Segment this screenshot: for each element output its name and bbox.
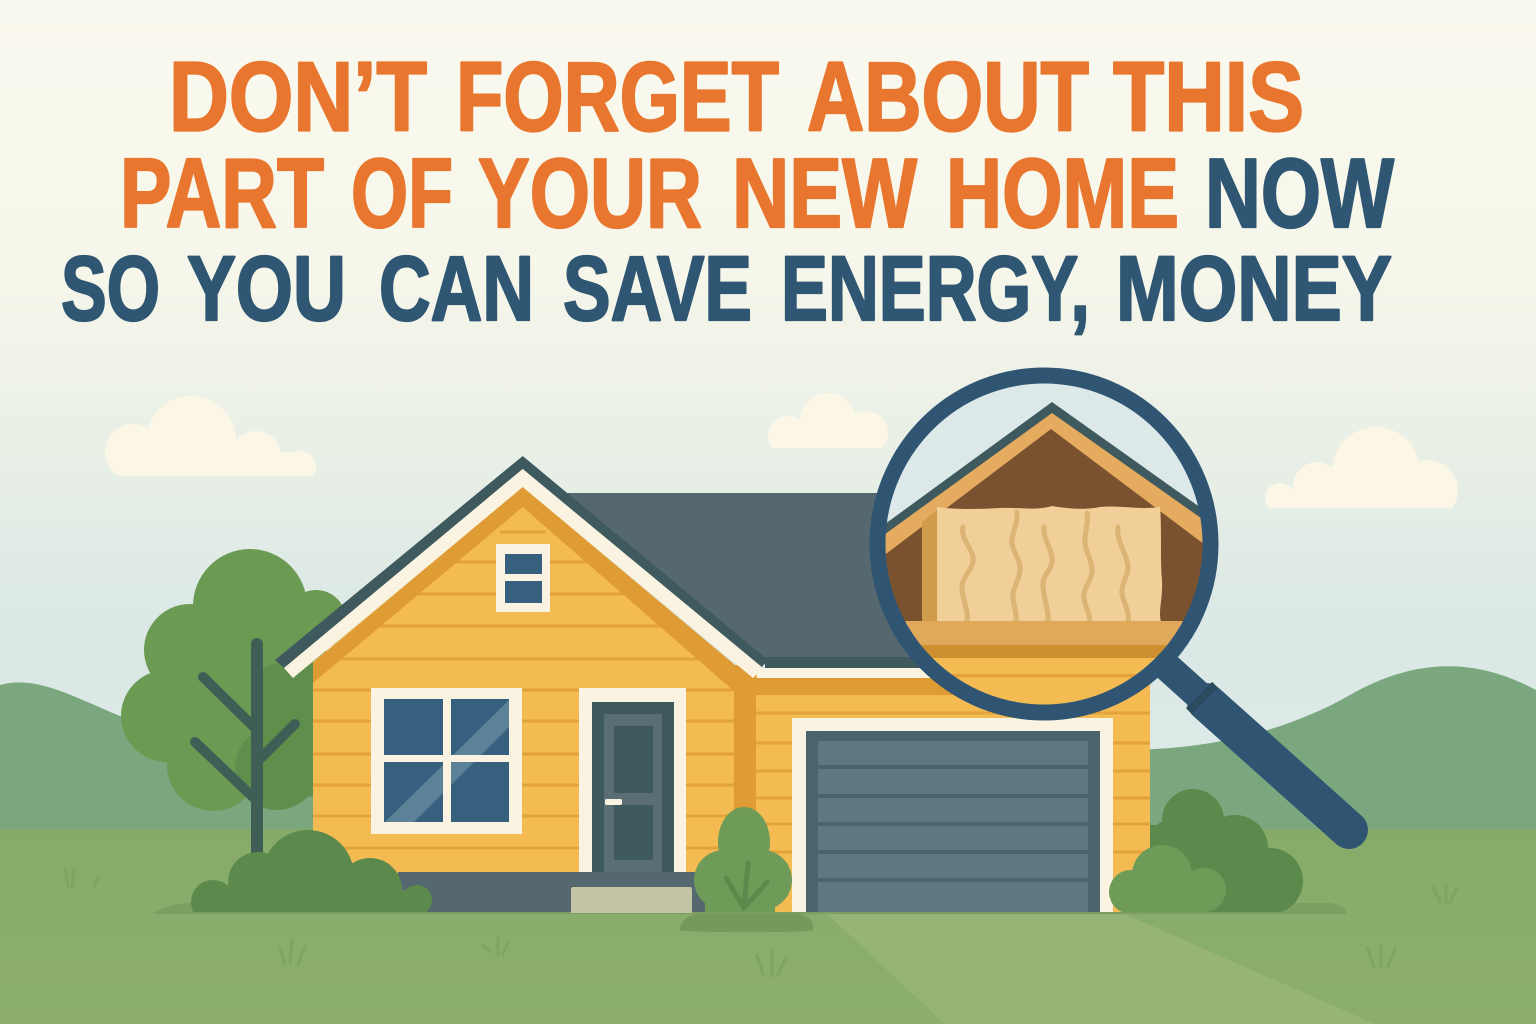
title line 2: YOUR [478, 138, 702, 248]
bush right back [1150, 789, 1303, 914]
title line 3: SAVE [563, 238, 752, 340]
title line 1: DON’T [169, 42, 427, 152]
cloud right [1265, 427, 1458, 508]
rafter [886, 413, 1202, 554]
siding in lens [932, 658, 1156, 704]
ground shadow [152, 903, 1346, 914]
eave band orange [756, 678, 956, 695]
bush right front [1109, 845, 1226, 914]
tree crown shade [263, 650, 330, 800]
title line 1: THIS [1113, 42, 1304, 152]
roof edge dark [886, 402, 1200, 534]
title line 2: PART [120, 138, 324, 248]
wood stud [922, 510, 937, 622]
title line 2: NEW [732, 138, 917, 248]
driveway [825, 912, 1375, 1024]
insulation waves [962, 512, 1128, 622]
foundation [398, 872, 712, 912]
insulation batt [937, 506, 1162, 622]
title line 2: HOME [946, 138, 1179, 248]
lawn [0, 829, 1536, 1024]
title line 3: ENERGY, [781, 238, 1090, 340]
roof fascia [765, 657, 940, 668]
front door [579, 688, 686, 872]
tree [121, 549, 346, 860]
grass tufts [65, 868, 1457, 976]
wall left section [313, 487, 735, 873]
eave trim cream [757, 668, 942, 678]
hill left [0, 682, 420, 835]
title line 3: CAN [379, 238, 534, 340]
cloud middle [768, 393, 888, 448]
tree crown [121, 549, 346, 811]
cloud left [105, 396, 316, 476]
window glare [385, 700, 509, 822]
title line 1: ABOUT [807, 42, 1089, 152]
front window [371, 688, 522, 834]
gable roof edge [275, 456, 768, 668]
title line 2 [120, 138, 1179, 248]
main roof [565, 493, 935, 660]
wall post [734, 665, 756, 815]
magnifier handle [1165, 665, 1349, 830]
front step [571, 887, 692, 913]
title line 2 accent: NOW [1205, 138, 1394, 248]
gable trim orange [313, 487, 735, 692]
floor joist [905, 621, 1183, 645]
bush front left [191, 830, 432, 912]
bush center [694, 807, 792, 912]
house [275, 456, 1150, 913]
title line 3: SO [61, 238, 160, 340]
bush shadow [680, 914, 813, 932]
lens view: attic insulation [886, 384, 1202, 678]
tree trunk and branches [195, 644, 295, 860]
title line 3 [61, 238, 1392, 340]
hill right [1120, 666, 1536, 835]
title line 3: MONEY [1116, 238, 1392, 340]
gable trim cream [284, 469, 763, 678]
top plate [920, 645, 1168, 658]
title line 1 [169, 42, 1304, 152]
attic cavity [886, 429, 1202, 621]
title line 3: YOU [187, 238, 346, 340]
magnifier ring [878, 376, 1210, 712]
wall right section [735, 668, 1150, 912]
garage door [792, 718, 1113, 912]
magnifying glass [870, 376, 1349, 830]
siding lines [313, 532, 1150, 880]
title line 2: OF [351, 138, 453, 248]
attic window [496, 544, 550, 612]
title line 1: FORGET [456, 42, 779, 152]
title [61, 42, 1394, 340]
